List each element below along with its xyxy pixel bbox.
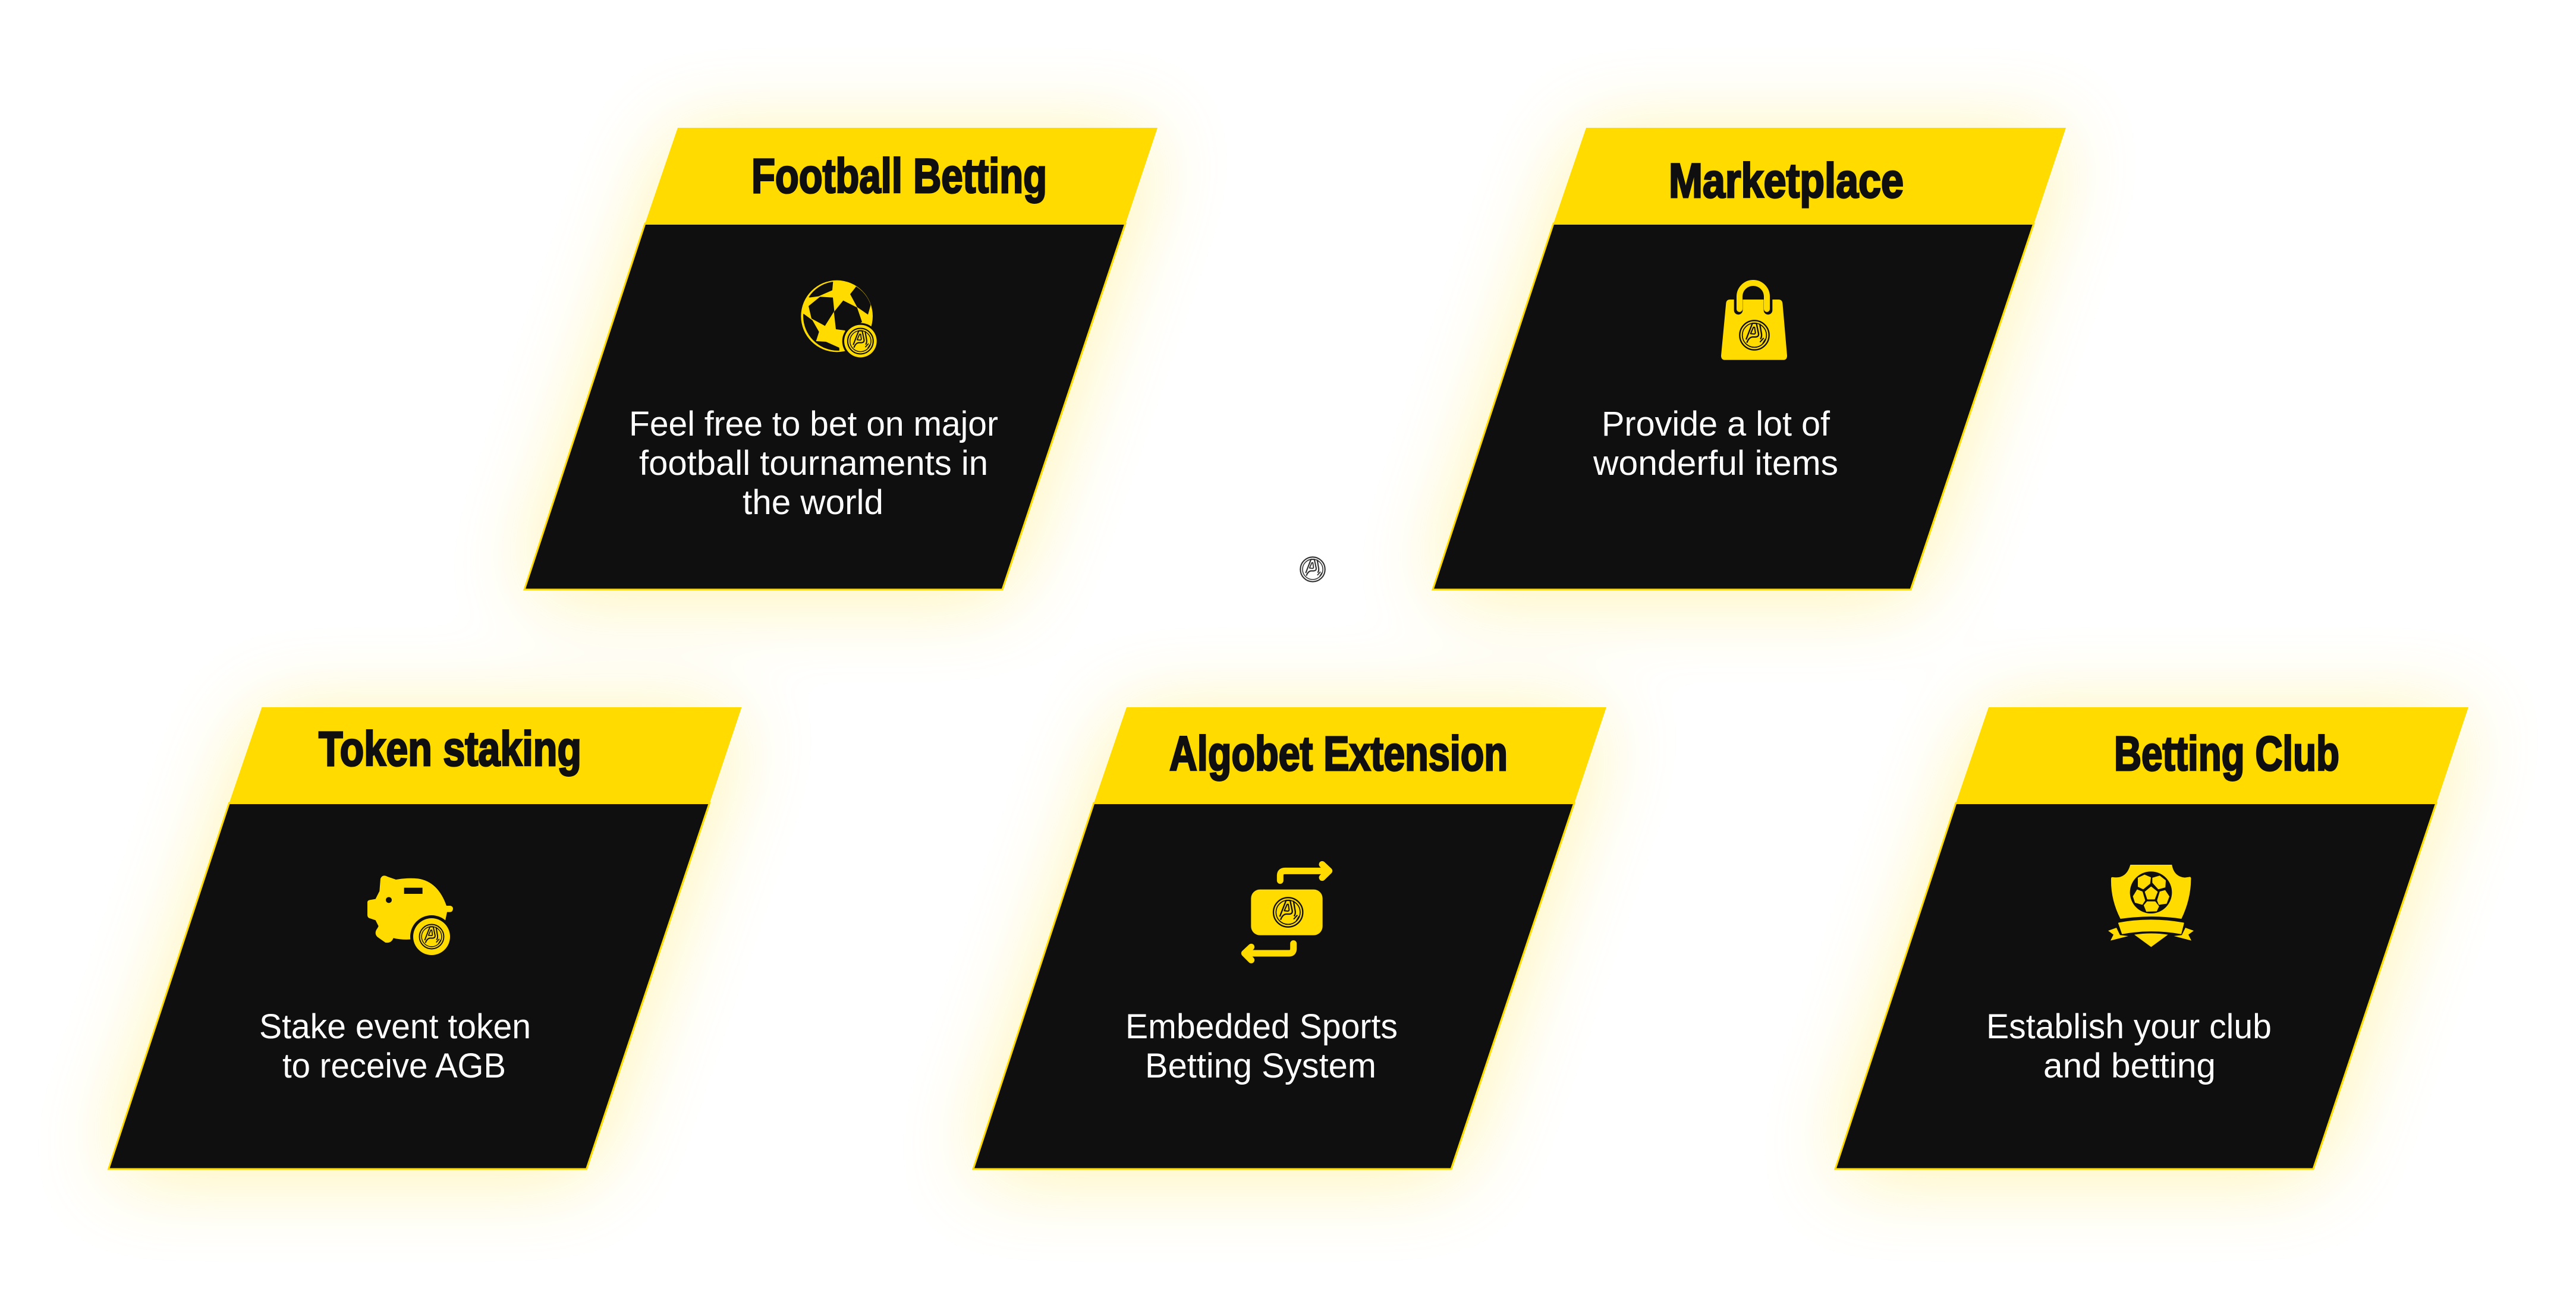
panel: Marketplace	[1433, 128, 2066, 590]
panel: Football Betting	[524, 128, 1158, 590]
description: and betting	[2043, 1047, 2216, 1085]
description: Establish your club	[1986, 1007, 2272, 1046]
panel: Token staking	[108, 707, 742, 1169]
description: the world	[743, 483, 883, 522]
icon: central logo	[1300, 557, 1325, 582]
card body	[108, 803, 710, 1169]
description	[1986, 1007, 2272, 1085]
card body	[1433, 223, 2034, 590]
card header band	[644, 128, 1158, 225]
card body	[1835, 803, 2436, 1169]
heading: Algobet Extension	[1169, 727, 1508, 781]
icon: club shield	[2108, 865, 2194, 947]
card body	[973, 803, 1574, 1169]
heading: Marketplace	[1669, 154, 1904, 208]
icon: exchange arrows	[1244, 864, 1329, 960]
icon: shopping bag	[1721, 283, 1787, 360]
description: Stake event token	[259, 1007, 531, 1046]
description: Feel free to bet on major	[629, 405, 998, 443]
card body	[524, 223, 1125, 590]
card header band	[1955, 707, 2468, 804]
heading: Betting Club	[2114, 727, 2339, 781]
description: Provide a lot of	[1602, 405, 1830, 443]
icon: football with coin	[801, 281, 877, 358]
description: wonderful items	[1593, 444, 1838, 483]
heading: Token staking	[319, 722, 581, 776]
description	[1125, 1007, 1398, 1085]
description: to receive AGB	[282, 1047, 506, 1085]
description	[259, 1007, 531, 1085]
description: Betting System	[1145, 1047, 1376, 1085]
panel: Betting Club	[1835, 707, 2468, 1169]
description	[629, 405, 998, 522]
card header band	[229, 707, 742, 804]
description	[1593, 405, 1838, 483]
description: football tournaments in	[639, 444, 988, 483]
icon: piggy bank with coin	[367, 875, 453, 958]
card header band	[1093, 707, 1606, 804]
panel: Algobet Extension	[973, 707, 1606, 1169]
description: Embedded Sports	[1125, 1007, 1398, 1046]
heading: Football Betting	[751, 149, 1047, 203]
card header band	[1553, 128, 2066, 225]
